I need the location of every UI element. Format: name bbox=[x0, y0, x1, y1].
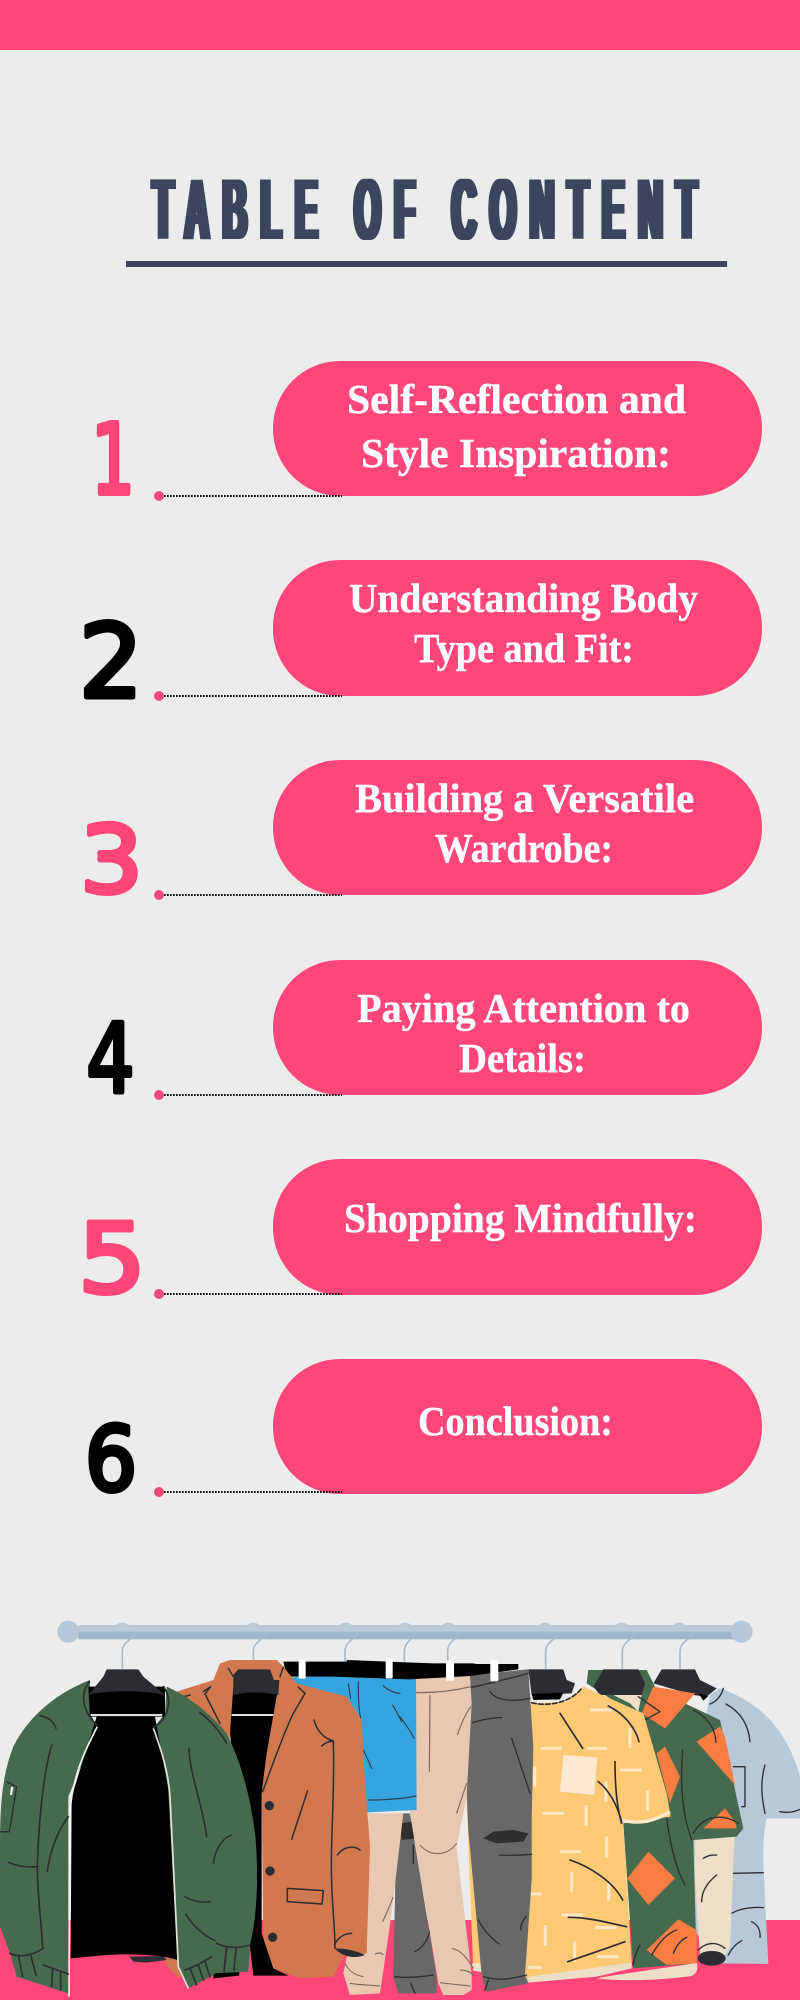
bottom pink band bbox=[0, 1920, 800, 2000]
leader 3 bbox=[154, 890, 342, 900]
number 2: 2 bbox=[79, 603, 143, 722]
grey jeans bbox=[393, 1669, 533, 1993]
beige pants bbox=[343, 1675, 473, 1995]
pill 1 bbox=[273, 361, 762, 496]
pill 3: Wardrobe: bbox=[435, 825, 613, 871]
number 1: 1 bbox=[91, 404, 135, 516]
leader 1 bbox=[154, 491, 342, 501]
pill 1: Self-Reflection and bbox=[347, 376, 686, 422]
yellow t-shirt bbox=[467, 1669, 671, 1983]
item 1 bbox=[91, 361, 762, 516]
patterned green shirt bbox=[587, 1669, 743, 1980]
orange blazer bbox=[165, 1660, 370, 1978]
cream sleeve bbox=[695, 1825, 735, 1966]
number 5: 5 bbox=[78, 1203, 146, 1315]
item 2 bbox=[79, 560, 762, 722]
pill 3: Building a Versatile bbox=[355, 775, 694, 821]
pill 4: Paying Attention to bbox=[357, 985, 690, 1031]
number 6: 6 bbox=[85, 1407, 137, 1511]
leader 5 bbox=[154, 1289, 342, 1299]
clothes rack illustration bbox=[0, 1621, 800, 1997]
number 3: 3 bbox=[80, 806, 143, 914]
pill 3 bbox=[273, 760, 762, 895]
top pink bar bbox=[0, 0, 800, 50]
blue shorts bbox=[290, 1673, 417, 1812]
item 5 bbox=[78, 1159, 762, 1315]
item 6 bbox=[85, 1359, 762, 1511]
number 4: 4 bbox=[86, 1005, 134, 1115]
item 3 bbox=[80, 760, 762, 914]
pill 4: Details: bbox=[459, 1035, 586, 1081]
pill 2: Type and Fit: bbox=[414, 625, 634, 671]
pill 2 bbox=[273, 560, 762, 696]
pill 4 bbox=[273, 960, 762, 1095]
leader 6 bbox=[154, 1487, 342, 1497]
title: TABLE OF CONTENT bbox=[153, 161, 697, 257]
shoe bbox=[129, 1956, 167, 1963]
hanger hooks bbox=[122, 1632, 693, 1669]
leader 2 bbox=[154, 691, 342, 701]
pill 5: Shopping Mindfully: bbox=[344, 1195, 697, 1241]
light blue shirt bbox=[653, 1669, 800, 1964]
pill 1: Style Inspiration: bbox=[361, 430, 671, 476]
rail bbox=[57, 1621, 753, 1643]
pill 2: Understanding Body bbox=[349, 575, 698, 621]
belts and loops bbox=[283, 1658, 518, 1681]
green bomber jacket bbox=[0, 1669, 257, 1997]
leader 4 bbox=[154, 1090, 342, 1100]
pill 5 bbox=[273, 1159, 762, 1295]
item 4 bbox=[86, 960, 762, 1115]
pill 6: Conclusion: bbox=[418, 1398, 613, 1444]
pill 6 bbox=[273, 1359, 762, 1494]
